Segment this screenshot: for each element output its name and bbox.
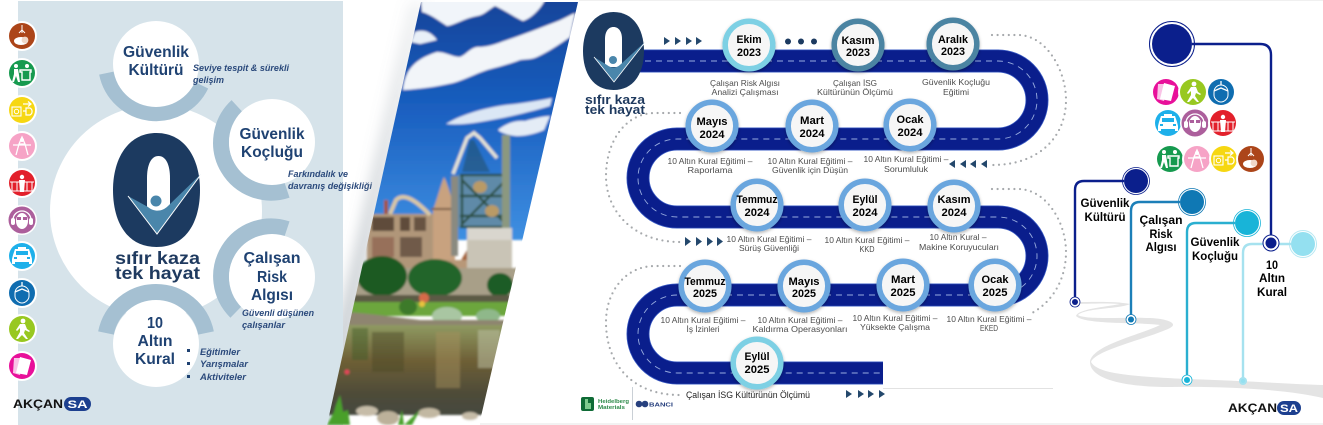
caption: Ocak 2025: EKED	[980, 324, 998, 333]
label: Güvenlik Kültürü	[1080, 198, 1130, 224]
node: Ocak 2025: 2025	[982, 287, 1008, 299]
node: Mayıs 2024	[688, 102, 736, 150]
node: Temmuz 2025: Temmuz	[684, 276, 726, 288]
caption: Mayıs 2024	[668, 157, 753, 175]
circle: Çalışan Risk Algısı: Çalışan	[244, 250, 300, 267]
logo: Akçansa right: SA	[1280, 403, 1298, 415]
node: Ekim 2023	[725, 21, 773, 69]
caption: Temmuz 2024: Sürüş Güvenliği	[739, 244, 799, 253]
node: Eylül 2025	[733, 339, 781, 387]
logo: Akçansa right	[1228, 401, 1301, 415]
photo: cement plant and pond	[320, 0, 582, 425]
circle: Güvenlik Kültürü: Kültürü	[128, 62, 184, 79]
node: Temmuz 2025: 2025	[693, 288, 717, 300]
circle: 10 Altın Kural: Kural	[135, 351, 175, 368]
caption: Eylül 2024: KKD	[860, 245, 875, 254]
arrows: row 5	[846, 390, 885, 398]
caption: Mayıs 2025: 10 Altın Kural Eğitimi –	[758, 316, 843, 325]
circle: Çalışan Risk Algısı: Algısı	[251, 287, 293, 304]
logo: Akçansa left: AKÇAN	[13, 397, 63, 411]
icon: work at height	[7, 131, 37, 161]
node: Eylül 2024: 2024	[852, 207, 878, 219]
icon: driving safety	[7, 241, 37, 271]
caption: Ocak 2025	[946, 315, 1032, 333]
caption: Mayıs 2024: Raporlama	[688, 166, 733, 175]
node: Ocak 2025	[971, 261, 1019, 309]
text: Güvenlik Koçluğu note: Farkındalık ve	[288, 169, 349, 180]
node: Eylül 2025: 2025	[744, 364, 770, 376]
node: Mayıs 2024: 2024	[700, 129, 725, 141]
caption: Ekim 2023	[710, 79, 780, 97]
label: Güvenlik Kültürü: Güvenlik	[1080, 198, 1130, 210]
caption: Temmuz 2025	[660, 316, 746, 334]
label: Güvenlik Koçluğu: Koçluğu	[1192, 251, 1238, 263]
icon: pedestrian	[1178, 77, 1208, 107]
circle: Çalışan Risk Algısı: Risk	[257, 269, 287, 286]
connector: Çalışan Risk Algısı	[1126, 188, 1206, 324]
caption: Kasım 2023: Çalışan İSG	[833, 78, 877, 88]
timeline captions	[660, 78, 1032, 400]
text: Güvenlik Koçluğu note: davranış değişikliği	[288, 181, 372, 192]
caption: Eylül 2025: Çalışan İSG Kültürünün Ölçümü	[686, 390, 810, 400]
icon: lifting people	[1155, 144, 1185, 174]
node: Temmuz 2025	[681, 262, 729, 310]
node: Aralık 2023: Aralık	[938, 34, 969, 46]
label: Çalışan Risk Algısı: Çalışan	[1140, 215, 1182, 227]
caption: Ocak 2024	[864, 155, 949, 174]
circle: Güvenlik Koçluğu	[221, 99, 315, 193]
caption: Kasım 2023: Kültürünün Ölçümü	[817, 87, 893, 97]
label: Güvenlik Koçluğu	[1190, 237, 1240, 263]
caption: Ekim 2023: Analizi Çalışması	[712, 88, 778, 97]
label: 10 Altın Kural	[1257, 260, 1287, 299]
caption: Mart 2024: 10 Altın Kural Eğitimi –	[768, 157, 853, 166]
caption: Kasım 2024: Makine Koruyucuları	[919, 243, 999, 252]
caption: Temmuz 2025: 10 Altın Kural Eğitimi –	[660, 316, 746, 325]
caption: Mayıs 2025	[752, 316, 848, 334]
panel: safety programme circles	[106, 21, 315, 387]
list: 10 Altın Kural activities: Yarışmalar	[200, 359, 249, 370]
logo: sıfır kaza tek hayat large: sıfır kaza	[115, 248, 200, 268]
icon: pedestrian	[7, 314, 37, 344]
node: Kasım 2023: 2023	[846, 47, 870, 59]
icon: energy isolation	[1209, 144, 1239, 174]
logo: Akçansa left	[13, 397, 91, 411]
node: Mart 2024	[788, 102, 836, 150]
logos: Heidelberg Materials and Sabancı	[581, 387, 674, 420]
caption: Mart 2024	[768, 157, 853, 175]
caption: Kasım 2024	[919, 233, 999, 252]
caption: Mart 2025: Yüksekte Çalışma	[860, 323, 930, 332]
text: Güvenlik Koçluğu note	[288, 169, 372, 192]
node: Mart 2024: 2024	[800, 128, 825, 140]
logos: Heidelberg Materials and Sabancı: Materials	[598, 405, 625, 411]
node: Kasım 2024: 2024	[942, 207, 967, 219]
road: grey illustration	[1075, 302, 1323, 398]
arrows: row 2	[949, 160, 987, 168]
label: Çalışan Risk Algısı: Algısı	[1146, 242, 1176, 254]
factory	[367, 133, 512, 284]
logo: sıfır kaza tek hayat small: sıfır kaza	[585, 93, 646, 107]
circle: Güvenlik Koçluğu: Güvenlik	[240, 126, 305, 143]
logo: sıfır kaza tek hayat large	[113, 133, 202, 283]
caption: Temmuz 2024	[726, 235, 812, 253]
list: 10 Altın Kural activities: Eğitimler	[200, 347, 241, 358]
node: Aralık 2023	[929, 20, 977, 68]
caption: Aralık 2023: Eğitimi	[943, 88, 969, 97]
node: Ocak 2024: Ocak	[896, 114, 924, 126]
circle: 10 Altın Kural	[106, 292, 206, 387]
caption: Mart 2024: Güvenlik için Düşün	[772, 166, 848, 175]
icon: driving safety	[1153, 108, 1183, 138]
label: Güvenlik Koçluğu: Güvenlik	[1190, 237, 1240, 249]
caption: Eylül 2024	[824, 236, 910, 254]
node: Kasım 2023: Kasım	[842, 35, 875, 47]
icon: work at height	[1182, 144, 1212, 174]
logo: sıfır kaza tek hayat large: tek hayat	[115, 263, 200, 283]
icon: lifting people	[7, 58, 37, 88]
caption: Temmuz 2025: İş İzinleri	[686, 324, 720, 334]
node: Mayıs 2025: Mayıs	[788, 276, 820, 288]
connector: 10 Altın Kural light	[1239, 230, 1316, 385]
node: Kasım 2023	[834, 21, 882, 69]
caption: Mart 2025: 10 Altın Kural Eğitimi –	[852, 314, 938, 323]
node: Temmuz 2024	[733, 181, 781, 229]
timeline nodes	[681, 20, 1019, 387]
node: Eylül 2024: Eylül	[852, 194, 878, 206]
circle: Güvenlik Koçluğu: Koçluğu	[241, 144, 303, 161]
text: Güvenlik Kültürü note: Seviye tespit & sürekli	[193, 63, 289, 74]
circle: 10 Altın Kural: Altın	[138, 333, 172, 350]
icon: think safety	[7, 278, 37, 308]
node: Mart 2025: Mart	[891, 274, 915, 286]
trees	[357, 256, 407, 296]
circle: Güvenlik Kültürü	[107, 21, 201, 113]
foreground	[356, 406, 378, 416]
caption: Ocak 2024: 10 Altın Kural Eğitimi –	[864, 155, 949, 164]
logos: Heidelberg Materials and Sabancı: Heidelberg	[598, 399, 629, 405]
central white circle	[50, 105, 262, 317]
circle: 10 Altın Kural: 10	[147, 315, 163, 332]
connector: 10 Altın Kural dark	[1150, 22, 1271, 243]
arrows: row 3	[685, 237, 723, 246]
circle: Çalışan Risk Algısı	[221, 226, 315, 320]
icon: protective equipment	[1180, 108, 1210, 138]
caption: Aralık 2023	[922, 78, 990, 97]
caption: Ekim 2023: Çalışan Risk Algısı	[710, 79, 780, 88]
icon: protective equipment	[7, 205, 37, 235]
icon: work permits	[7, 351, 37, 381]
node: Ocak 2025: Ocak	[982, 274, 1009, 286]
logo: sıfır kaza tek hayat small: tek hayat	[585, 103, 646, 117]
caption: Ocak 2024: Sorumluluk	[884, 165, 929, 174]
node: Kasım 2024: Kasım	[938, 194, 971, 206]
logos: Heidelberg Materials and Sabancı: BANCI	[649, 402, 674, 408]
text: Güvenlik Kültürü note: gelişim	[192, 75, 225, 86]
node: Mart 2025: 2025	[890, 287, 916, 299]
label: 10 Altın Kural: Altın	[1259, 273, 1285, 285]
logo: Akçansa right: AKÇAN	[1228, 401, 1277, 415]
logo: Akçansa left: SA	[68, 399, 88, 411]
caption: Mayıs 2024: 10 Altın Kural Eğitimi –	[668, 157, 753, 166]
label: 10 Altın Kural: Kural	[1257, 287, 1287, 299]
label: Güvenlik Kültürü: Kültürü	[1084, 212, 1126, 224]
node: Temmuz 2024: 2024	[744, 207, 770, 219]
node: Temmuz 2024: Temmuz	[736, 194, 778, 206]
connector: Güvenlik Koçluğu	[1182, 210, 1260, 385]
caption: Eylül 2024: 10 Altın Kural Eğitimi –	[824, 236, 910, 245]
logo: sıfır kaza tek hayat small	[583, 12, 646, 117]
icon: machine guards	[1208, 108, 1238, 138]
caption: Temmuz 2024: 10 Altın Kural Eğitimi –	[726, 235, 812, 244]
panel: left background	[18, 1, 343, 425]
caption: Mayıs 2025: Kaldırma Operasyonları	[752, 325, 848, 334]
photo shadow	[343, 7, 419, 352]
dots: between Ekim and Kasım	[785, 38, 817, 44]
node: Mayıs 2024: Mayıs	[696, 116, 728, 128]
connector: Güvenlik Kültürü	[1070, 168, 1150, 307]
node: Eylül 2024	[841, 181, 889, 229]
list: 10 Altın Kural activities: Aktiviteler	[199, 372, 247, 383]
icons: left column of golden rules	[7, 21, 37, 381]
node: Ocak 2024: 2024	[898, 127, 923, 139]
node: Mayıs 2025	[780, 262, 828, 310]
caption: Aralık 2023: Güvenlik Koçluğu	[922, 78, 990, 87]
icon: load lifting	[1236, 144, 1266, 174]
node: Ekim 2023: Ekim	[736, 34, 762, 46]
icon: load lifting	[7, 21, 37, 51]
label: Çalışan Risk Algısı	[1140, 215, 1182, 254]
circle: Güvenlik Kültürü: Güvenlik	[123, 44, 189, 61]
text: Güvenlik Kültürü note	[192, 63, 289, 86]
node: Mart 2025	[879, 261, 927, 309]
label: 10 Altın Kural: 10	[1266, 260, 1278, 272]
text: Çalışan Risk Algısı note	[242, 308, 314, 331]
node: Mayıs 2025: 2025	[792, 288, 816, 300]
icon: think safety	[1206, 77, 1236, 107]
caption: Kasım 2024: 10 Altın Kural –	[930, 233, 987, 242]
text: Çalışan Risk Algısı note: Güvenli düşünen	[242, 308, 314, 319]
node: Kasım 2024	[930, 182, 978, 230]
icon: work permits	[1151, 77, 1181, 107]
label: Çalışan Risk Algısı: Risk	[1150, 229, 1173, 241]
node: Aralık 2023: 2023	[941, 46, 965, 58]
icon: energy isolation	[7, 95, 37, 125]
node: Ekim 2023: 2023	[737, 47, 761, 59]
caption: Ocak 2025: 10 Altın Kural Eğitimi –	[946, 315, 1032, 324]
dotted trail	[606, 35, 1066, 395]
text: Çalışan Risk Algısı note: çalışanlar	[242, 320, 286, 331]
road: timeline path	[638, 61, 1037, 373]
icons: right cluster of golden rules	[1151, 77, 1266, 174]
list: 10 Altın Kural activities	[187, 347, 249, 383]
caption: Mart 2025	[852, 314, 938, 332]
icon: machine guards	[7, 168, 37, 198]
caption: Kasım 2023	[817, 78, 893, 97]
node: Eylül 2025: Eylül	[744, 351, 770, 363]
arrows: start	[664, 37, 702, 45]
node: Mart 2024: Mart	[800, 115, 824, 127]
node: Ocak 2024	[886, 101, 934, 149]
